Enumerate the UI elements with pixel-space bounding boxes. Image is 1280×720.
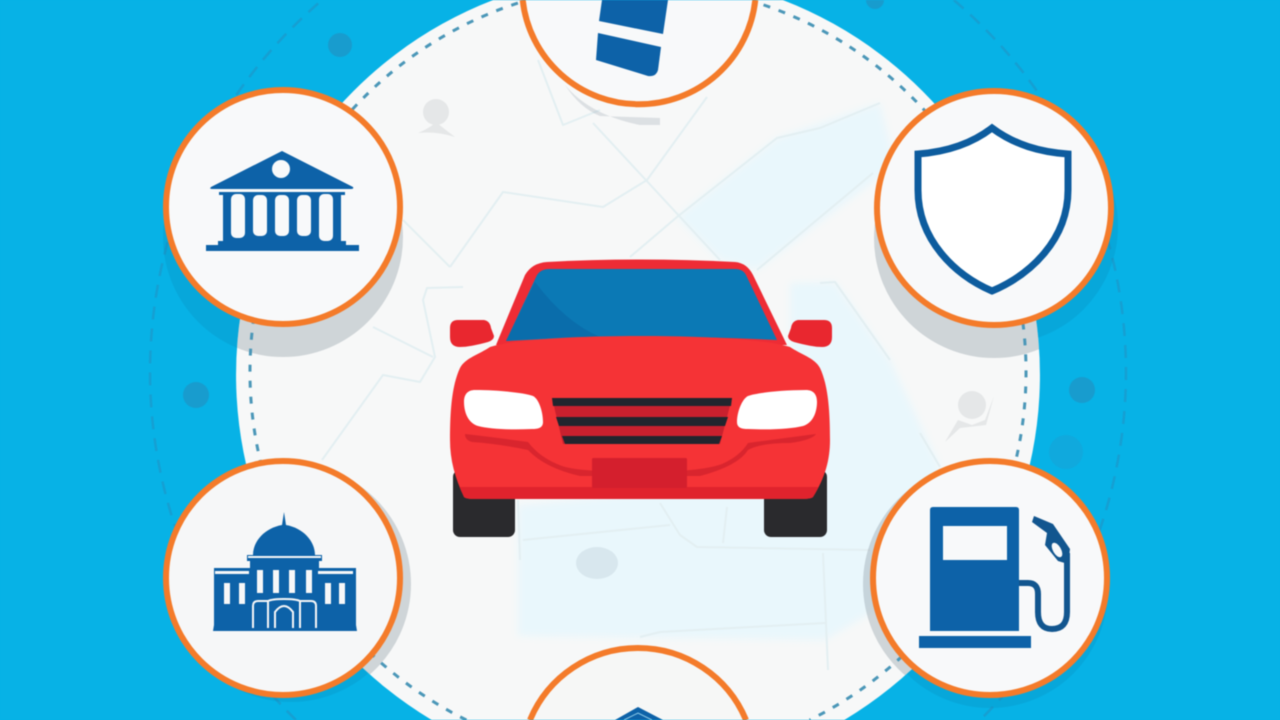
infographic canvas (148, 0, 1128, 720)
bank columns (206, 192, 359, 251)
bank pediment (210, 151, 353, 189)
car bumper shade (460, 487, 818, 499)
car mirrors (450, 320, 494, 347)
shield icon (918, 128, 1068, 291)
central white map disc (236, 0, 1040, 720)
icon badge: top (cropped) (523, 0, 755, 104)
map: grey pin markers (418, 99, 994, 442)
pump hose (1019, 553, 1067, 629)
map: blue-grey marker (576, 547, 618, 579)
car grille (552, 398, 732, 444)
map: pale blue blocks (518, 103, 940, 640)
building silhouette (213, 512, 357, 631)
pump nozzle (1032, 516, 1070, 564)
badge shadows on blue background (163, 108, 1118, 708)
badge shadows on disc (236, 88, 1040, 676)
icon badge: domed government building (166, 461, 400, 695)
car roof frame (496, 260, 787, 345)
outer dashed ring and dots on background (150, 0, 1126, 720)
pump base (919, 636, 1031, 648)
map: road lines (322, 60, 940, 670)
icon badge: bank (166, 90, 400, 324)
tube icon (599, 0, 668, 34)
icon badge: fuel pump (873, 461, 1107, 695)
car headlights (464, 390, 543, 429)
icon badge: shield (877, 91, 1111, 325)
car crease line (465, 434, 816, 476)
car body (450, 336, 830, 499)
pump body (930, 507, 1019, 631)
building windows (215, 556, 353, 604)
car windshield (506, 269, 777, 341)
house icon (615, 707, 663, 720)
car number plate (592, 458, 687, 488)
red car, front view (445, 260, 835, 537)
icon badge: bottom (cropped) (530, 648, 746, 720)
building entrance arches (253, 599, 316, 628)
car tyres (453, 470, 515, 537)
inner dashed ring (250, 0, 1026, 720)
